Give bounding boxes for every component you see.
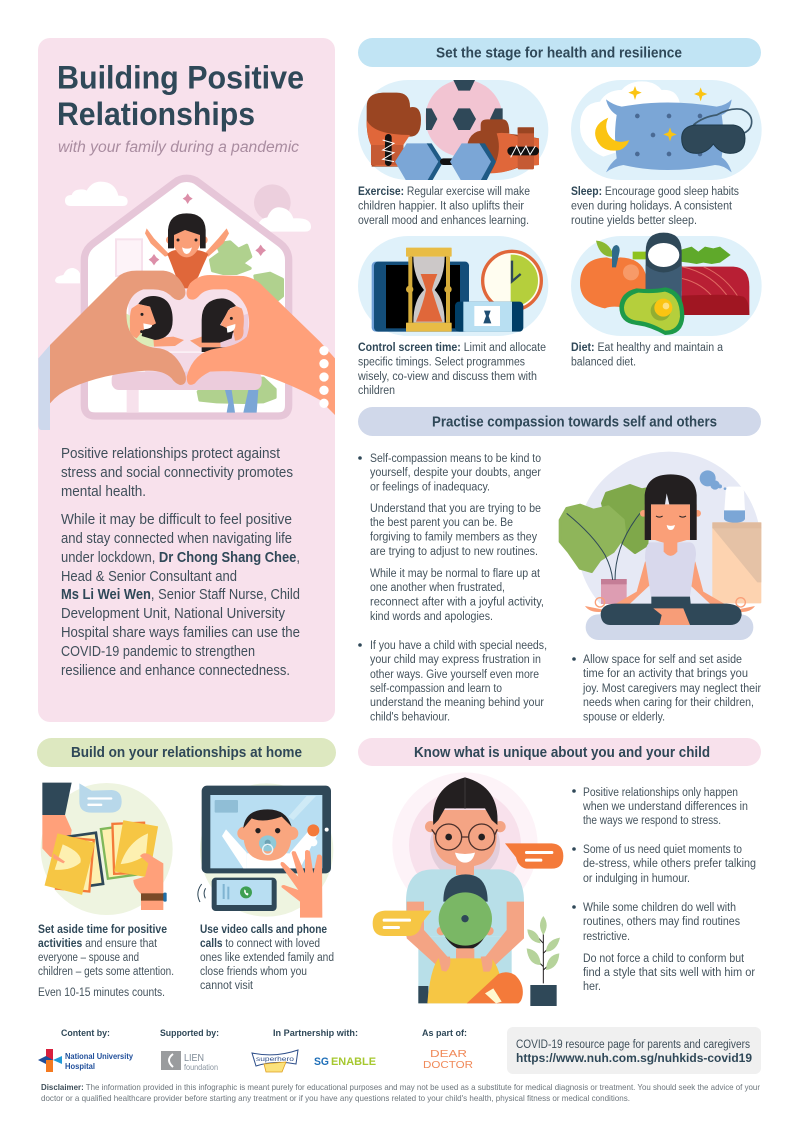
text: positive activities: everyone – spouse and <box>38 952 139 964</box>
text: self-compassion bullet: the best parent you can be. Be <box>370 517 513 529</box>
footer: Dear Doctor: As part of: <box>422 1028 467 1039</box>
authors paragraph: Development Unit, National University <box>61 606 286 622</box>
text: quiet moments bullet <box>572 844 756 885</box>
authors paragraph: Head & Senior Consultant and <box>61 569 237 585</box>
disclaimer: doctor or a qualified healthcare provider before starting any treatment or if you have any questions related to your child's health, physical fitness or medical conditions. <box>41 1094 630 1103</box>
footer: partners: ENABLE <box>331 1056 376 1068</box>
text: quiet moments bullet: or indulging in humour. <box>583 873 690 885</box>
text: exercise: overall mood and enhances learning. <box>358 215 529 227</box>
text: self-compassion bullet: While it may be normal to flare up at <box>370 568 541 580</box>
text: exercise: children happier. It also uplifts their <box>358 200 524 212</box>
text: routines bullet: her. <box>583 981 601 993</box>
footer: Dear Doctor: DOCTOR <box>423 1059 473 1071</box>
text: special needs bullet: understand the meaning behind your <box>370 697 544 709</box>
text: sleep: routine yields better sleep. <box>571 215 697 227</box>
text: positive activities: children – gets some attention. <box>38 966 174 978</box>
icon: exercise equipment <box>358 80 548 182</box>
text: relationships and stress bullet: when we understand differences in <box>582 801 748 813</box>
text: video calls <box>200 924 334 992</box>
footer: partners <box>252 1028 376 1072</box>
text: routines bullet: routines, others may find routines <box>583 916 740 928</box>
text: special needs bullet: If you have a child with special needs, <box>370 640 547 652</box>
text: special needs bullet <box>358 640 547 724</box>
text: self-compassion bullet: Understand that you are trying to be <box>370 503 541 515</box>
text: exercise <box>358 186 530 227</box>
text: special needs bullet: child's behaviour. <box>370 712 450 724</box>
authors paragraph: Hospital share ways families can use the <box>61 625 300 641</box>
text: exercise: Exercise: Regular exercise will make <box>358 186 530 198</box>
illustration: family inside a house framed by heart-shaped hands <box>38 178 335 430</box>
icon: screen time tablet, hourglass and clock <box>358 236 548 336</box>
icon: healthy food <box>571 233 762 336</box>
heading: know what is unique <box>358 738 761 766</box>
icon: video call tablet and phone <box>198 783 333 918</box>
heading: know what is unique: Know what is unique about you and your child <box>414 745 710 761</box>
title: Building Positive <box>57 60 304 96</box>
text: positive activities: Set aside time for positive <box>38 924 167 936</box>
intro paragraph: stress and social connectivity promotes <box>61 465 293 481</box>
footer: supported by Lien Foundation <box>160 1028 219 1072</box>
text: special needs bullet: self-compassion and learn to <box>370 683 502 695</box>
text: self-compassion bullet <box>358 453 544 623</box>
text: positive activities <box>38 924 174 999</box>
text: video calls: calls to connect with loved <box>200 938 320 950</box>
text: quiet moments bullet: de-stress, while others prefer talking <box>583 858 756 870</box>
intro paragraph <box>61 446 293 500</box>
text: diet: balanced diet. <box>571 356 636 368</box>
text: allow space bullet: spouse or elderly. <box>583 712 665 724</box>
callout: resource page: COVID-19 resource page for parents and caregivers <box>516 1039 750 1051</box>
heading: set the stage <box>358 38 761 67</box>
text: sleep: even during holidays. A consistent <box>571 200 733 212</box>
text: allow space bullet: time for an activity that brings you <box>583 668 748 680</box>
footer: partners: superhero <box>256 1057 295 1063</box>
text: allow space bullet: Allow space for self and set aside <box>583 654 742 666</box>
text: self-compassion bullet: are trying to adjust to new routines. <box>370 546 538 558</box>
intro paragraph: Positive relationships protect against <box>61 446 280 462</box>
icon: parent and child with skateboard <box>373 772 563 1006</box>
authors paragraph: Ms Li Wei Wen, Senior Staff Nurse, Child <box>61 587 300 603</box>
icon: sleep pillow and mask <box>571 80 762 180</box>
footer: content by NUH: National University <box>65 1051 133 1061</box>
text: special needs bullet: your child may express frustration in <box>370 654 541 666</box>
text: video calls: Use video calls and phone <box>200 924 327 936</box>
text: self-compassion bullet: forgiving to family members as they <box>370 532 537 544</box>
text: routines bullet: While some children do well with <box>583 902 736 914</box>
footer: Dear Doctor: DEAR <box>430 1048 468 1060</box>
text: self-compassion bullet: kind words and apologies. <box>370 611 493 623</box>
text: control screen time: children <box>358 385 395 397</box>
disclaimer <box>41 1083 760 1103</box>
text: sleep: Sleep: Encourage good sleep habits <box>571 186 739 198</box>
text: video calls: ones like extended family and <box>200 952 334 964</box>
authors paragraph: COVID-19 pandemic to strengthen <box>61 644 255 660</box>
subtitle: with your family during a pandemic <box>58 139 299 156</box>
text: positive activities: Even 10-15 minutes counts. <box>38 987 165 999</box>
footer: supported by Lien Foundation: LIEN <box>184 1052 204 1064</box>
text: self-compassion bullet: reconnect after with a joyful activity, <box>370 596 544 608</box>
text: special needs bullet: other ways. Give yourself even more <box>370 669 539 681</box>
callout: resource page: https://www.nuh.com.sg/nuhkids-covid19 <box>516 1053 752 1065</box>
authors paragraph: and stay connected when navigating life <box>61 531 292 547</box>
text: relationships and stress bullet: Positive relationships only happen <box>583 787 738 799</box>
text: relationships and stress bullet <box>572 787 748 827</box>
text: self-compassion bullet: one another when frustrated, <box>370 582 505 594</box>
text: diet <box>571 342 724 368</box>
title <box>57 60 304 132</box>
footer: content by NUH <box>38 1028 133 1072</box>
callout: resource page <box>507 1027 761 1074</box>
text: control screen time: wisely, co-view and discuss them with <box>357 371 537 383</box>
heading: practise compassion <box>358 407 761 436</box>
text: diet: Diet: Eat healthy and maintain a <box>571 342 724 354</box>
authors paragraph: under lockdown, Dr Chong Shang Chee, <box>61 550 300 566</box>
text: routines bullet <box>572 902 755 993</box>
text: control screen time: specific timings. Select programmes <box>358 356 525 368</box>
text: video calls: close friends whom you <box>200 966 307 978</box>
text: allow space bullet: joy. Most caregivers may neglect their <box>582 683 761 695</box>
footer: content by NUH: Content by: <box>61 1028 110 1039</box>
icon: meditating woman <box>560 452 761 640</box>
authors paragraph: While it may be difficult to feel positive <box>61 512 292 528</box>
text: allow space bullet: needs when caring for their children, <box>583 697 754 709</box>
footer: partners: SG <box>314 1056 329 1068</box>
text: positive activities: activities and ensure that <box>38 938 158 950</box>
text: self-compassion bullet: yourself, despite your doubts, anger <box>370 467 541 479</box>
footer: content by NUH: Hospital <box>65 1061 95 1071</box>
text: routines bullet: Do not force a child to conform but <box>583 953 745 965</box>
heading: build on relationships: Build on your relationships at home <box>71 745 302 761</box>
text: relationships and stress bullet: the ways we respond to stress. <box>583 815 721 827</box>
footer: supported by Lien Foundation: foundation <box>184 1062 218 1072</box>
footer: Dear Doctor <box>422 1028 473 1071</box>
text: control screen time <box>357 342 546 397</box>
title: Relationships <box>57 96 255 132</box>
authors paragraph: resilience and enhance connectedness. <box>61 663 290 679</box>
panel: intro <box>38 38 335 722</box>
icon: playing cards <box>41 783 173 915</box>
intro paragraph: mental health. <box>61 484 146 500</box>
text: control screen time: Control screen time: Limit and allocate <box>358 342 546 354</box>
text: sleep <box>571 186 739 227</box>
authors paragraph <box>61 512 300 679</box>
heading: set the stage: Set the stage for health and resilience <box>436 46 682 62</box>
text: allow space bullet <box>572 654 761 724</box>
text: self-compassion bullet: or feelings of inadequacy. <box>370 482 490 494</box>
disclaimer: Disclaimer: The information provided in this infographic is meant purely for educational purposes and may not be used as a substitute for medical diagnosis or treatment. You should seek the advice of your <box>41 1083 760 1092</box>
heading: practise compassion: Practise compassion towards self and others <box>432 414 717 430</box>
text: self-compassion bullet: Self-compassion means to be kind to <box>370 453 541 465</box>
heading: build on relationships <box>37 738 336 767</box>
footer: partners: In Partnership with: <box>273 1028 358 1039</box>
text: video calls: cannot visit <box>200 980 254 992</box>
text: routines bullet: find a style that sits well with him or <box>583 967 755 979</box>
text: quiet moments bullet: Some of us need quiet moments to <box>583 844 742 856</box>
text: routines bullet: restrictive. <box>583 931 630 943</box>
footer: supported by Lien Foundation: Supported by: <box>160 1028 219 1039</box>
